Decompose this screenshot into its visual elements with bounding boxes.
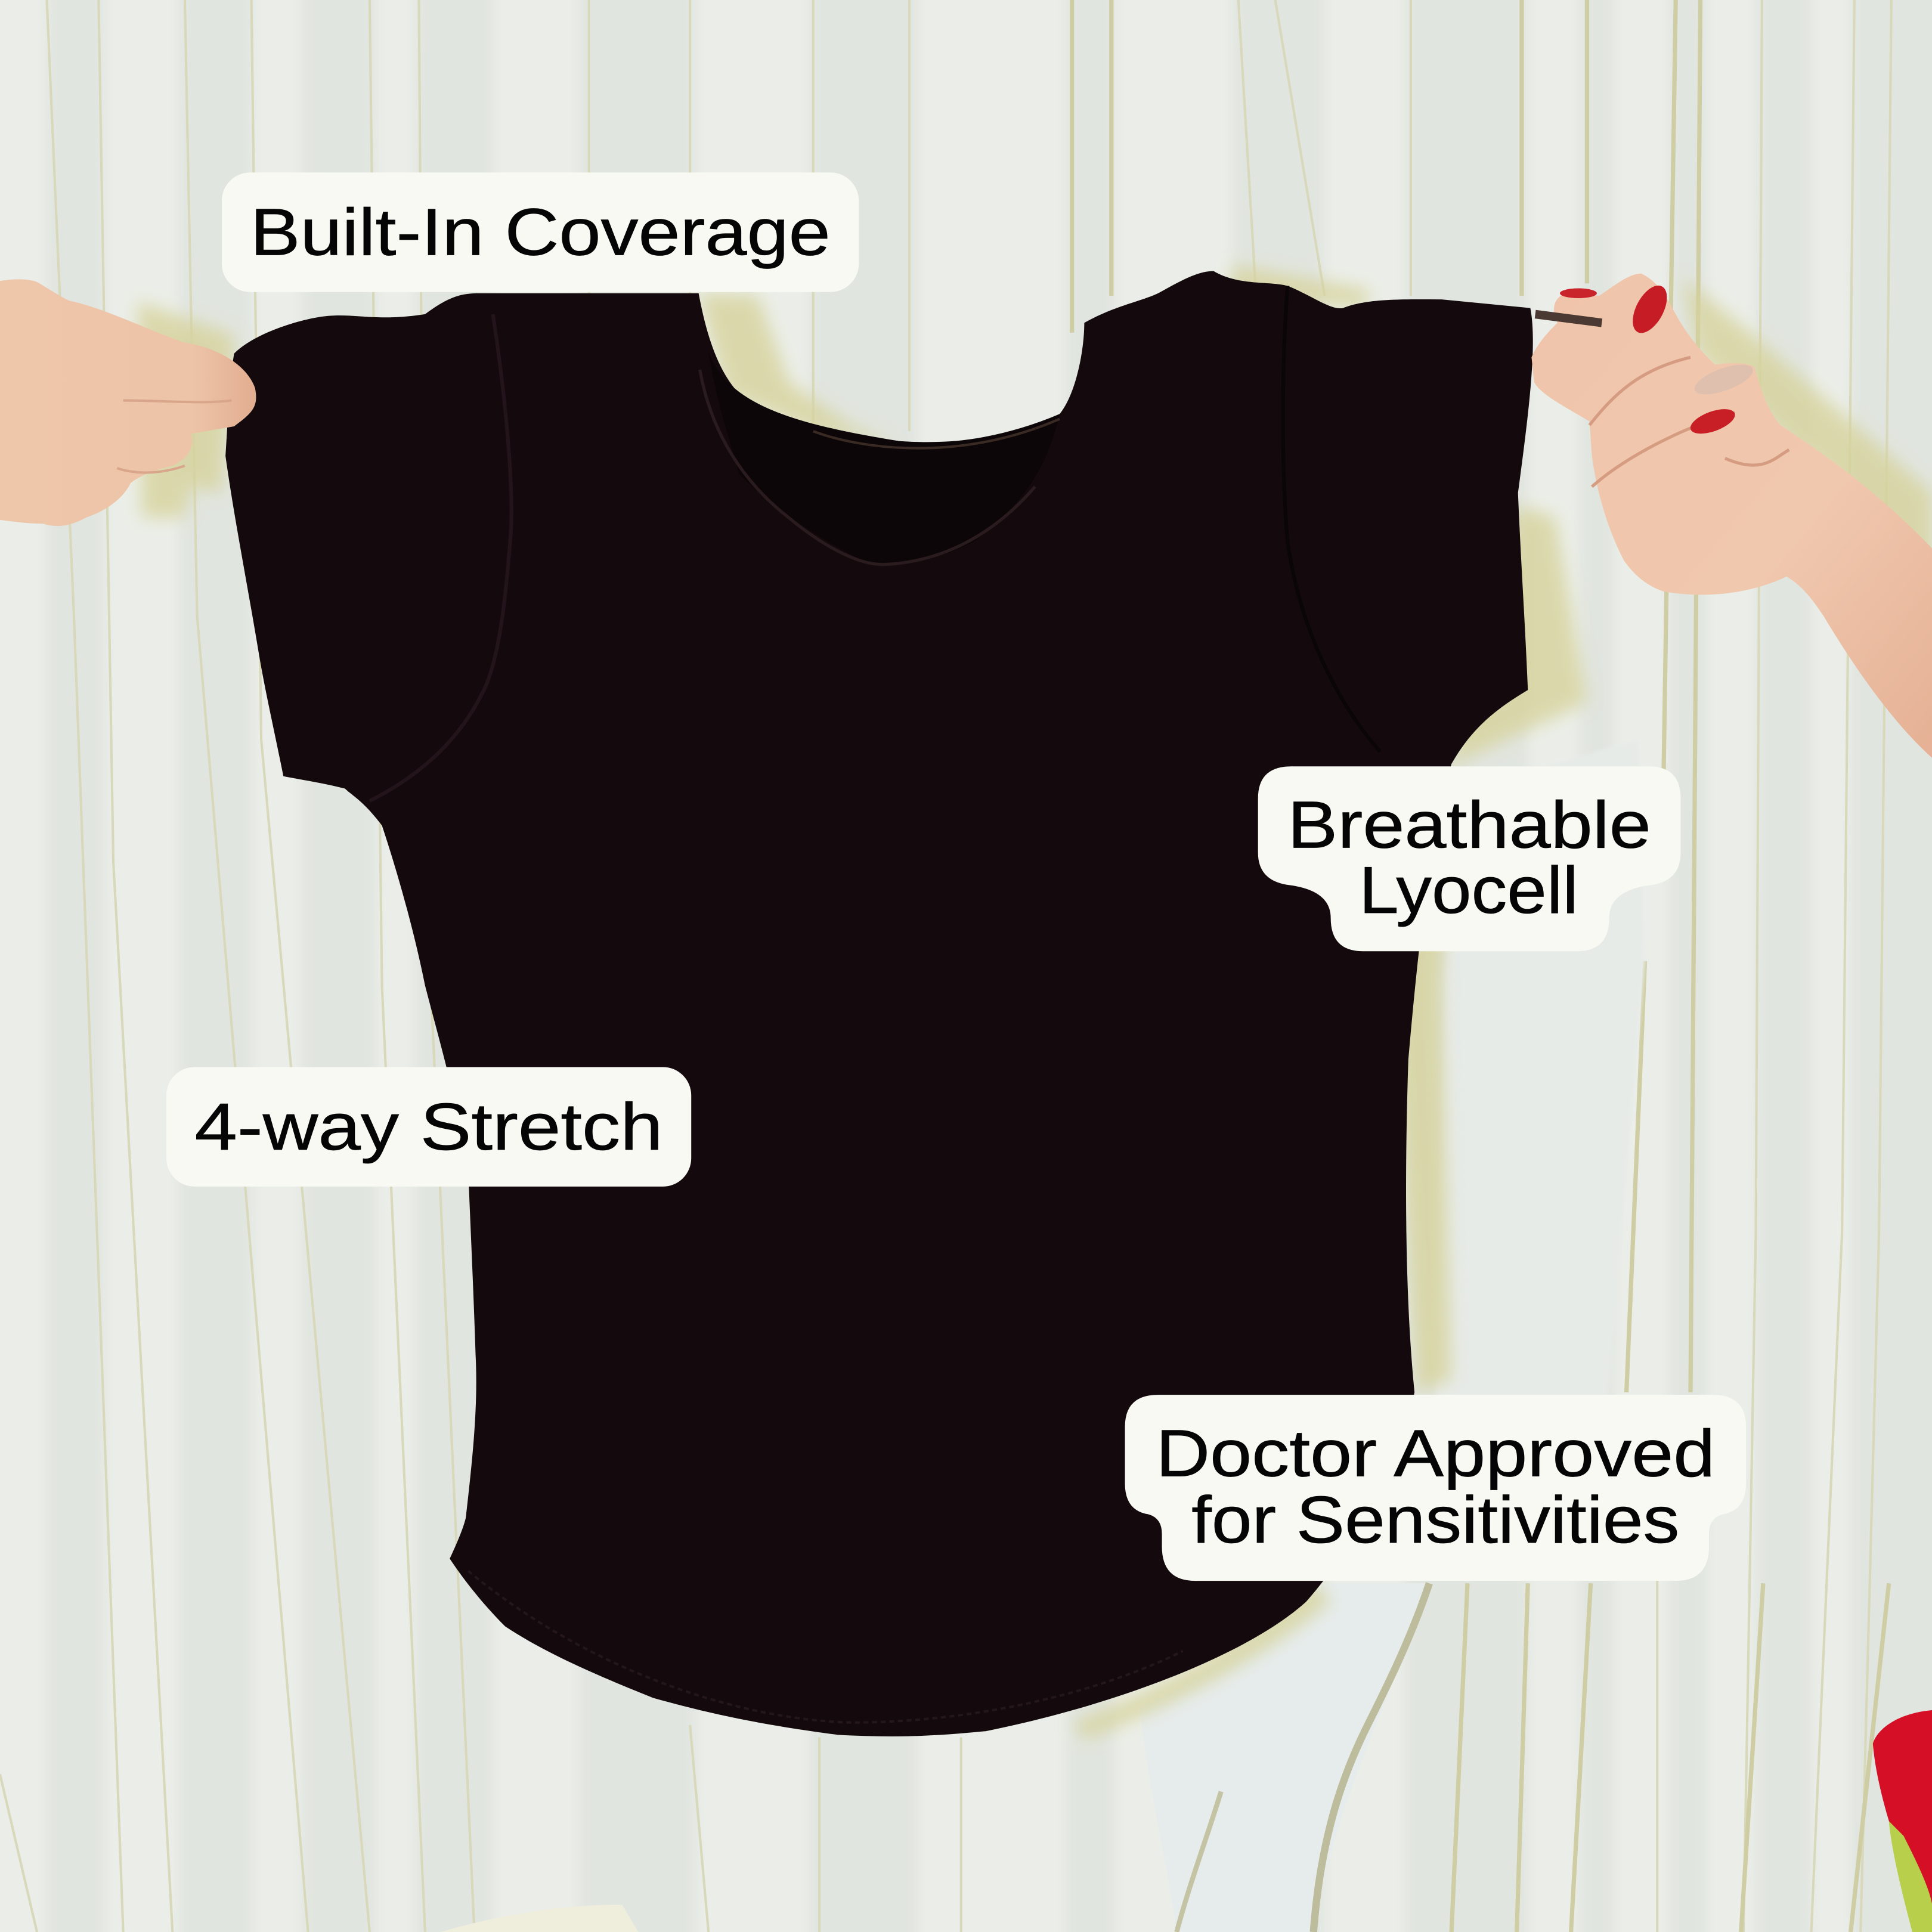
left hand: [0, 279, 256, 526]
label: Breathable Lyocell: Lyocell: [1359, 853, 1578, 927]
shirt shadow on curtain: [138, 265, 1932, 1740]
label: Doctor Approved for Sensitivities: Doctor Approved: [1156, 1416, 1715, 1490]
rose: [1873, 1710, 1932, 1932]
nails: [1560, 280, 1757, 439]
label: 4-way Stretch: 4-way Stretch: [194, 1089, 663, 1164]
label: Breathable Lyocell: Breathable: [1287, 788, 1651, 862]
label: Built-In Coverage: [222, 172, 859, 292]
t-shirt: [225, 271, 1533, 1736]
label: Built-In Coverage: Built-In Coverage: [250, 195, 831, 270]
label: Doctor Approved for Sensitivities: [1125, 1395, 1746, 1581]
strap held in fingers: [1535, 314, 1602, 323]
label: 4-way Stretch: [166, 1067, 691, 1187]
drape: gathered curtain fabric: [1140, 739, 1645, 1932]
label: Doctor Approved for Sensitivities: for Sensitivities: [1191, 1482, 1679, 1557]
right hand with red nails: [1531, 274, 1932, 758]
label: Breathable Lyocell: [1258, 766, 1680, 951]
sleeve and neck seams: [370, 314, 512, 801]
neck inner shading: [708, 351, 1060, 563]
white flower: [441, 1905, 638, 1932]
